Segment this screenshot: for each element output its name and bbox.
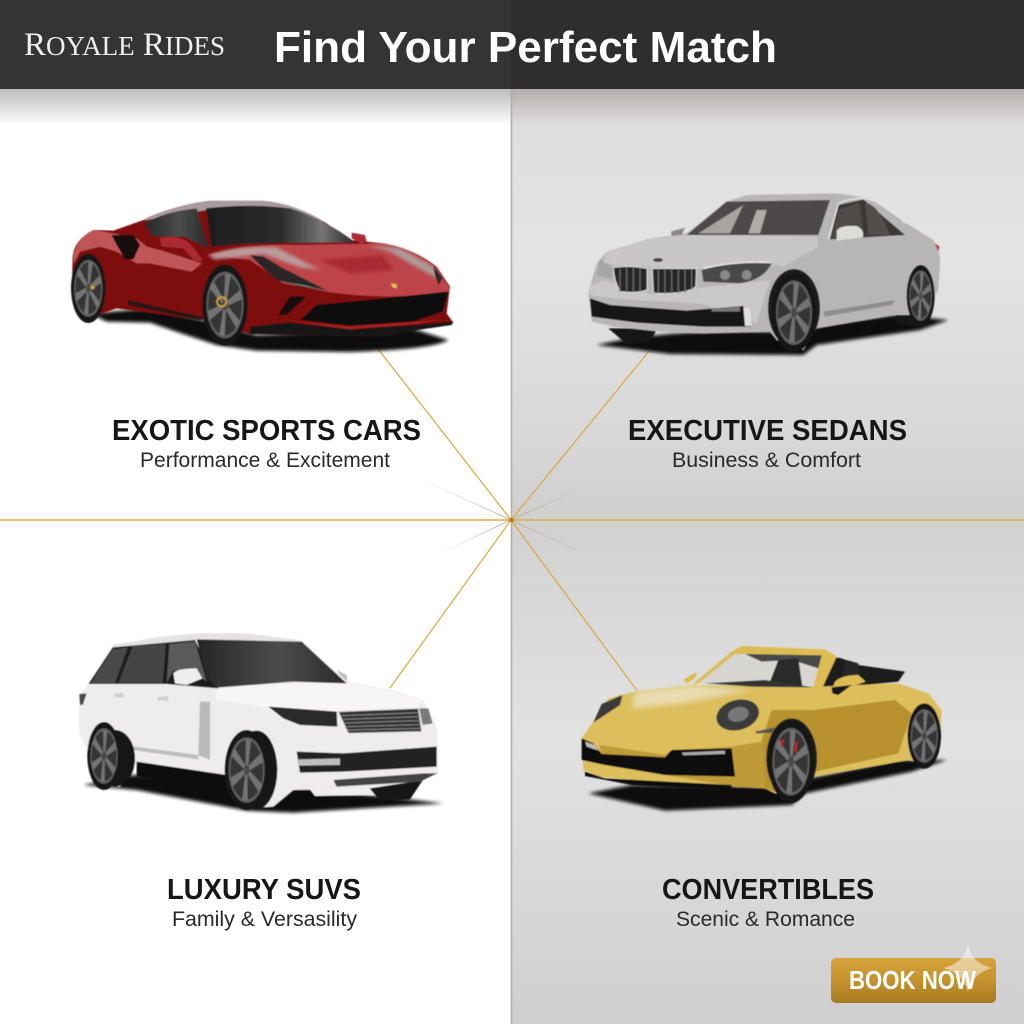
header shadow right	[511, 89, 1024, 125]
label: luxury suvs	[167, 874, 361, 931]
heading: CONVERTIBLES	[662, 874, 874, 906]
label: executive sedans	[628, 415, 907, 472]
brand logo: ROYALE RIDES	[24, 27, 225, 63]
subheading: Performance & Excitement	[140, 449, 390, 472]
car: silver executive sedan	[588, 193, 948, 357]
label: convertibles	[662, 874, 874, 931]
car: red sports car	[68, 201, 453, 352]
heading: EXECUTIVE SEDANS	[628, 415, 907, 447]
car: white luxury SUV	[78, 633, 443, 814]
icon: sparkle	[943, 944, 992, 992]
header bar	[0, 0, 1024, 89]
subheading: Family & Versasility	[172, 908, 357, 931]
car: yellow convertible	[582, 646, 947, 811]
subheading: Business & Comfort	[672, 449, 861, 472]
heading: LUXURY SUVS	[167, 874, 361, 906]
button text: BOOK NOW	[849, 967, 977, 995]
panel: left background	[0, 0, 511, 1024]
label: exotic sports cars	[112, 415, 421, 472]
subheading: Scenic & Romance	[676, 908, 855, 931]
book now button	[831, 944, 996, 1003]
panel: right background	[511, 0, 1024, 1024]
title: Find Your Perfect Match	[274, 23, 777, 72]
heading: EXOTIC SPORTS CARS	[112, 415, 421, 447]
header shadow left	[0, 89, 511, 125]
